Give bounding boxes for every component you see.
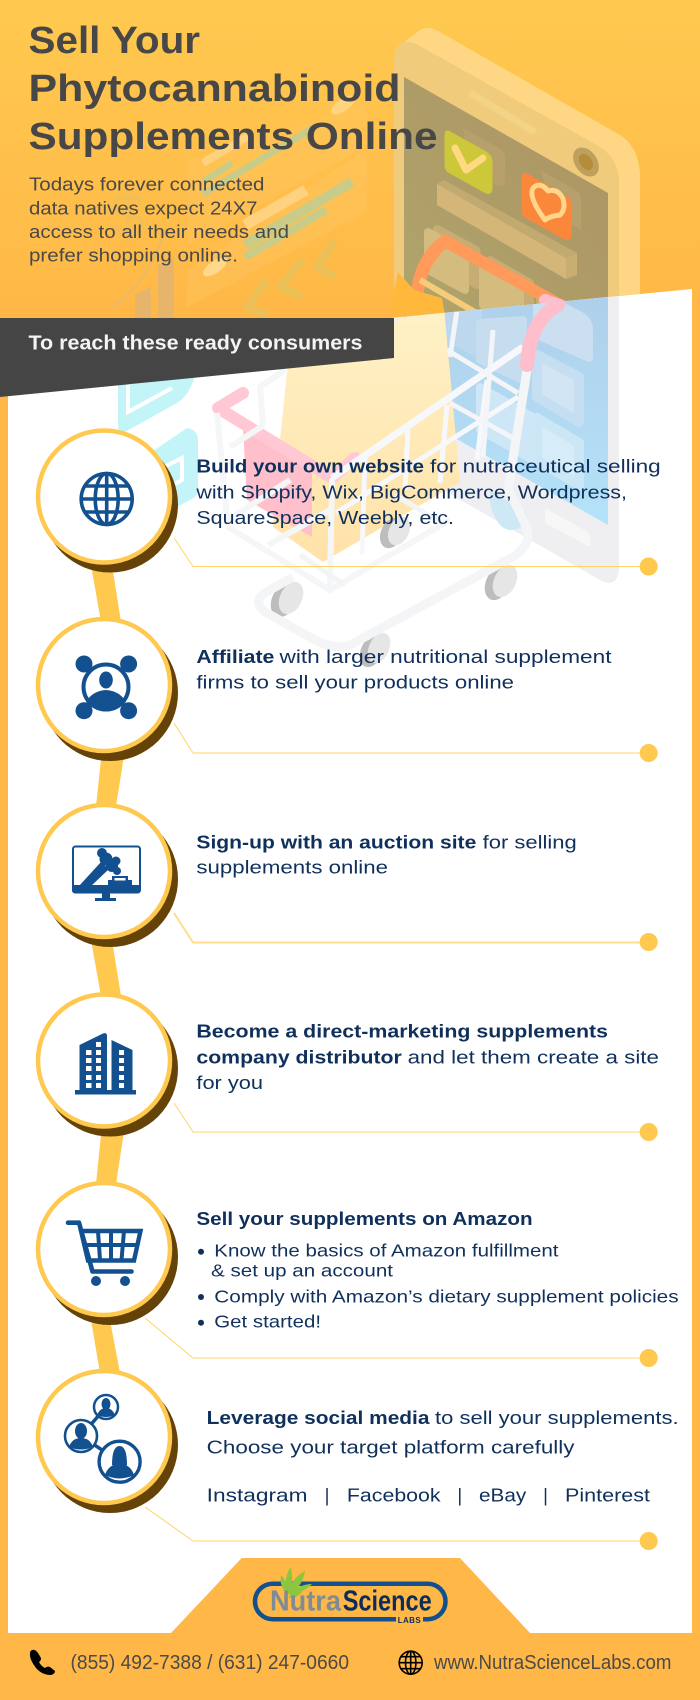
text: platforms list: |: [457, 1484, 462, 1505]
icon: globe: [81, 474, 132, 524]
timeline connectors: [91, 565, 125, 1373]
faded phone: [394, 296, 619, 583]
title: Supplements Online: [28, 116, 437, 158]
text: direct marketing: for you: [196, 1072, 263, 1093]
text: affiliate: [196, 646, 612, 693]
text: auction site: for selling: [483, 831, 577, 852]
title: Sell Your: [28, 20, 200, 62]
text: amazon list: Know the basics of Amazon fulfillment: [214, 1241, 559, 1261]
banner: to reach these ready consumers: [0, 318, 394, 397]
text: direct marketing: and let them create a site: [408, 1046, 659, 1067]
intro paragraph: Todays forever connected: [29, 174, 264, 194]
text: social media: to sell your supplements.: [435, 1407, 679, 1428]
text: direct marketing: Become a direct-marketing supplements: [196, 1020, 608, 1041]
footer band with trapezoid: [0, 1558, 700, 1700]
phone body: [394, 28, 640, 340]
step 3: auction site: [38, 805, 658, 951]
step 4: direct marketing distributor: [38, 994, 659, 1141]
text: platforms list: |: [543, 1484, 548, 1505]
text: platforms list: Facebook: [347, 1484, 441, 1505]
text: build your own website: Build your own website: [196, 456, 424, 476]
leader line and dot: [174, 538, 658, 576]
leader line and dot: [174, 913, 658, 951]
text: platforms list: eBay: [479, 1484, 527, 1505]
icon: buildings: [75, 1033, 136, 1094]
icon: globe: [399, 1651, 422, 1674]
medallion: [38, 430, 178, 572]
text: auction site: supplements online: [196, 856, 388, 877]
icon: social network: [65, 1395, 140, 1482]
logo: NutraScience Labs: [255, 1567, 446, 1625]
title: [28, 20, 437, 158]
intro paragraph: data natives expect 24X7: [29, 198, 258, 218]
cyan app tiles: [118, 378, 198, 506]
step 2: affiliate: [38, 619, 658, 762]
contact: website: www.NutraScienceLabs.com: [433, 1652, 671, 1674]
text: platforms list: [207, 1484, 650, 1505]
title: Phytocannabinoid: [28, 68, 400, 110]
intro paragraph: prefer shopping online.: [29, 244, 238, 266]
text: build your own website: SquareSpace, Weebly, etc.: [196, 507, 454, 528]
text: platforms list: Instagram: [207, 1484, 308, 1505]
cart wire frame: [217, 305, 558, 647]
text: social media: Choose your target platform carefully: [207, 1436, 575, 1457]
icon: monitor with gavel: [72, 846, 141, 901]
medallion: [38, 994, 178, 1136]
pink cart panel and handle: [218, 393, 355, 537]
phone app icons: [424, 128, 581, 309]
leader line and dot: [145, 1318, 658, 1367]
shopping bag: [273, 297, 460, 562]
step 6: social media: [38, 1371, 679, 1550]
text: build your own website: for nutraceutical selling: [430, 456, 661, 476]
icon: leaf: [281, 1567, 312, 1598]
text: build your own website: [195, 456, 661, 528]
logo: NutraScience Labs: Science: [343, 1586, 432, 1618]
icon: network person: [76, 656, 137, 719]
text: affiliate: Affiliate: [196, 646, 274, 667]
text: amazon list: Get started!: [214, 1311, 321, 1331]
chat bubbles and chart: [111, 92, 367, 320]
text: affiliate: firms to sell your products online: [196, 672, 514, 693]
text: social media: [207, 1407, 679, 1457]
logo: NutraScience Labs: LABS: [398, 1616, 421, 1625]
text: amazon list: Comply with Amazon’s dietary supplement policies: [214, 1286, 679, 1306]
step 1: build your own website: [38, 430, 661, 576]
medallion: [38, 1371, 178, 1513]
text: platforms list: Pinterest: [565, 1484, 650, 1505]
medallion: [38, 619, 178, 761]
banner: to reach these ready consumers: To reach these ready consumers: [28, 332, 362, 354]
illustration: phone and cart on white: [118, 296, 619, 668]
text: build your own website: with Shopify, Wix, BigCommerce, Wordpress,: [195, 482, 627, 502]
icon: telephone: [30, 1650, 55, 1675]
white content panel: [8, 289, 692, 1633]
contact: phone: (855) 492-7388 / (631) 247-0660: [70, 1652, 349, 1674]
leader line and dot: [145, 1507, 658, 1550]
logo: NutraScience Labs: Nutra: [270, 1586, 342, 1618]
text: social media: Leverage social media: [207, 1407, 430, 1428]
text: auction site: Sign-up with an auction site: [196, 831, 476, 852]
text: amazon list: & set up an account: [211, 1261, 393, 1281]
step 5: sell on amazon: [38, 1183, 679, 1367]
text: amazon list: Sell your supplements on Amazon: [196, 1208, 533, 1229]
text: auction site: [196, 831, 577, 877]
intro paragraph: [29, 174, 289, 266]
icon: shopping cart: [68, 1223, 140, 1286]
chat bubbles and chart: $: [111, 182, 145, 251]
text: platforms list: |: [325, 1484, 329, 1505]
text: direct marketing: company distributor: [196, 1046, 402, 1067]
illustration: phone and chat bubbles on orange: [111, 28, 640, 340]
text: direct marketing: [196, 1020, 659, 1093]
text: affiliate: with larger nutritional supplement: [278, 646, 612, 667]
leader line and dot: [174, 1103, 658, 1141]
medallion: [38, 1183, 178, 1325]
text: amazon list: [196, 1208, 679, 1331]
leader line and dot: [174, 723, 658, 762]
intro paragraph: access to all their needs and: [29, 221, 289, 242]
medallion: [38, 805, 178, 947]
cart wheels: [266, 513, 522, 671]
cart handle on orange: [388, 241, 562, 322]
